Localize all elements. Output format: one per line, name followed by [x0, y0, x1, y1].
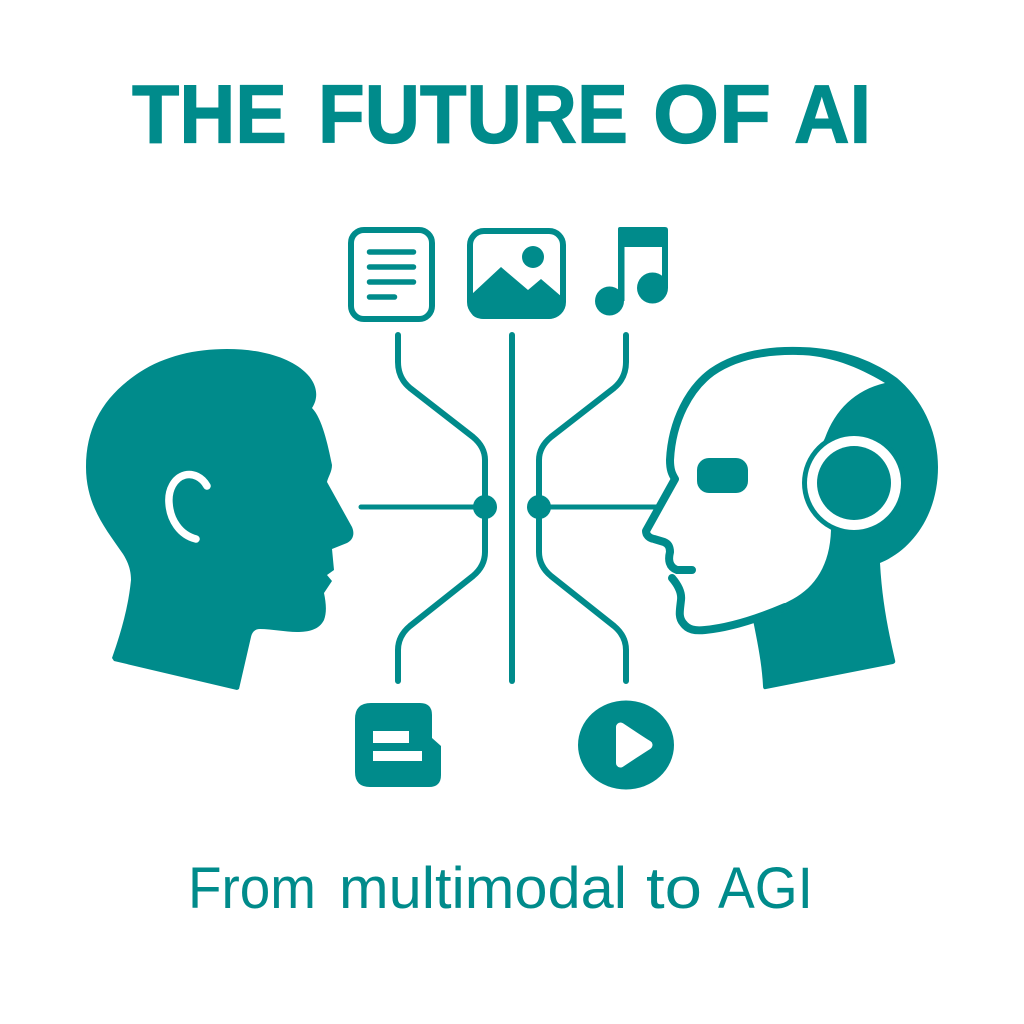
icon: image — [469, 231, 563, 319]
title — [132, 68, 871, 160]
human head — [86, 349, 353, 690]
subtitle: multimodal — [339, 856, 627, 921]
icon: bottom document — [355, 703, 441, 787]
title: THE — [132, 68, 287, 160]
robot back and neck — [753, 347, 938, 689]
robot face outline — [646, 351, 800, 630]
hub dot left — [473, 495, 497, 519]
robot head — [646, 347, 938, 689]
connector lines — [361, 335, 658, 681]
subtitle: AGI — [718, 856, 813, 921]
subtitle: From — [188, 856, 316, 921]
connector: bottom left — [398, 507, 485, 681]
connector: top right — [539, 335, 626, 507]
icon: play button — [578, 700, 674, 790]
human ear — [169, 474, 207, 539]
robot ear ring — [802, 431, 906, 535]
connector: bottom right — [539, 507, 626, 681]
connector: robot to hub — [539, 504, 658, 510]
title: AI — [794, 68, 871, 160]
subtitle: to — [646, 856, 702, 921]
icon: music note — [595, 227, 668, 316]
title: FUTURE — [318, 68, 628, 160]
connector: top left — [398, 335, 485, 507]
icon: text document — [351, 230, 432, 319]
connector: human to hub — [361, 504, 485, 510]
hub dot right — [527, 495, 551, 519]
robot eye — [697, 458, 748, 493]
subtitle — [188, 856, 813, 921]
connector: center — [509, 335, 515, 681]
title: OF — [653, 68, 771, 160]
